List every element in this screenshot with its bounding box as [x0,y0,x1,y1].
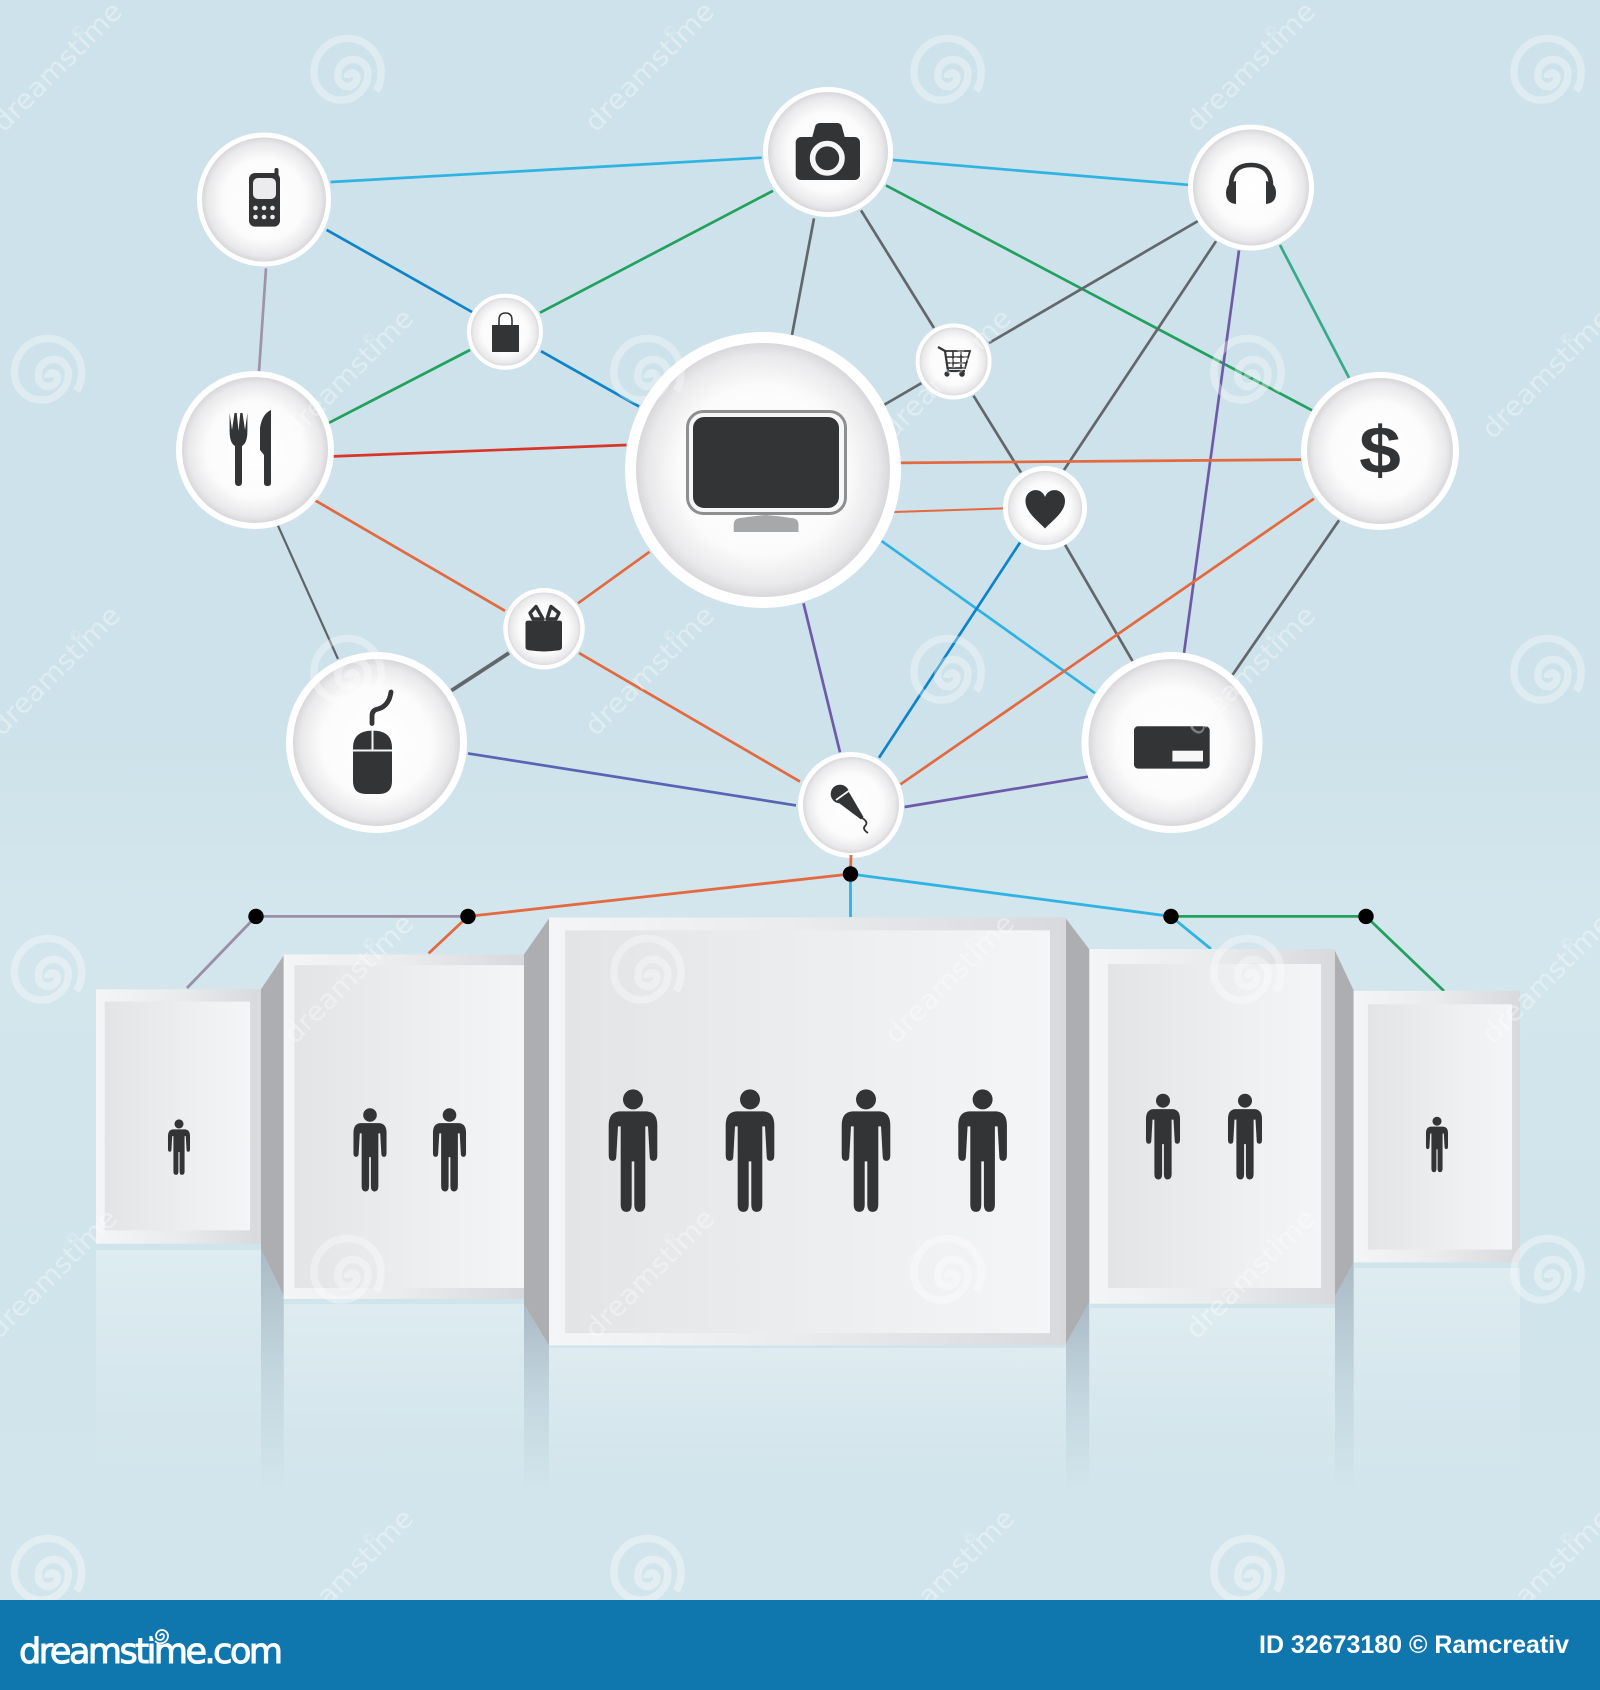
footer logo: dreamstime.com [19,1632,283,1672]
icon: bag [492,313,519,352]
connector tree to audience boxes [187,855,1444,991]
watermark text: dreamstime [579,1203,721,1345]
box 1: one person [96,989,261,1244]
node: cutlery [179,374,331,526]
icon: microphone [831,785,868,833]
watermark text: © [1261,22,1282,43]
watermark text: dreamstime [579,0,721,138]
node: phone [200,135,328,264]
node: mouse [290,656,464,830]
node: microphone [800,754,902,856]
watermark text: dreamstime [1180,1203,1322,1345]
icon: mobile phone [249,168,280,227]
watermark text: dreamstime [579,600,721,742]
icon: card [1134,726,1210,769]
icon: cart [938,347,970,377]
floor reflections [96,1249,1520,1490]
footer credit: ID 32673180 © Ramcreativ [1259,1631,1569,1659]
watermark text: © [1557,934,1578,955]
watermark text: dreamstime [879,908,1021,1050]
node: credit card [1085,656,1259,830]
watermark text: dreamstime [1180,600,1322,742]
box 4: two people [1090,949,1354,1304]
watermark text: © [359,934,380,955]
watermark text: © [1557,1529,1578,1550]
watermark text: dreamstime [876,303,1018,445]
watermark text: © [359,1529,380,1550]
icon: fork and knife [230,410,271,486]
watermark text: dreamstime [1180,0,1322,138]
node: heart [1006,468,1084,548]
node: dollar [1304,375,1456,527]
watermark text: © [63,1229,84,1250]
people [1146,1094,1262,1179]
person [1426,1117,1448,1172]
icon: headphones [1226,165,1276,204]
watermark text: © [1261,1229,1282,1250]
box 5: one person [1354,991,1520,1262]
watermark text: © [1261,626,1282,647]
watermark text: dreamstime [879,1503,1021,1645]
network connector lines [259,158,1349,807]
icon: gift box [526,606,562,651]
watermark text: © [68,22,89,43]
icon: dollar sign: $ [1359,414,1401,488]
footer bar [0,1600,1600,1690]
node: gift [506,590,582,667]
icon: computer mouse [353,692,392,794]
node: shopping cart [918,326,990,398]
watermark text: © [960,1529,981,1550]
node: shopping bag [469,296,541,368]
node: monitor (central hub) [630,338,896,602]
watermark text: © [660,626,681,647]
watermark text: © [359,329,380,350]
watermark text: © [1557,329,1578,350]
watermark text: © [957,329,978,350]
person [168,1119,190,1175]
icon: heart [1026,490,1065,528]
node: headphones [1190,127,1312,248]
people [609,1089,1007,1212]
watermark text: © [660,22,681,43]
box 2: two people [261,954,524,1299]
icon: monitor [688,412,846,532]
watermark text: © [660,1229,681,1250]
people [353,1108,466,1192]
watermark text: © [960,934,981,955]
watermark text: dreamstime [278,303,420,445]
watermark text: © [66,626,87,647]
watermark text: dreamstime [278,908,420,1050]
icon: camera [796,123,860,180]
box 3: four people [524,918,1089,1345]
watermark text: dreamstime [278,1503,420,1645]
node: camera [766,90,890,214]
